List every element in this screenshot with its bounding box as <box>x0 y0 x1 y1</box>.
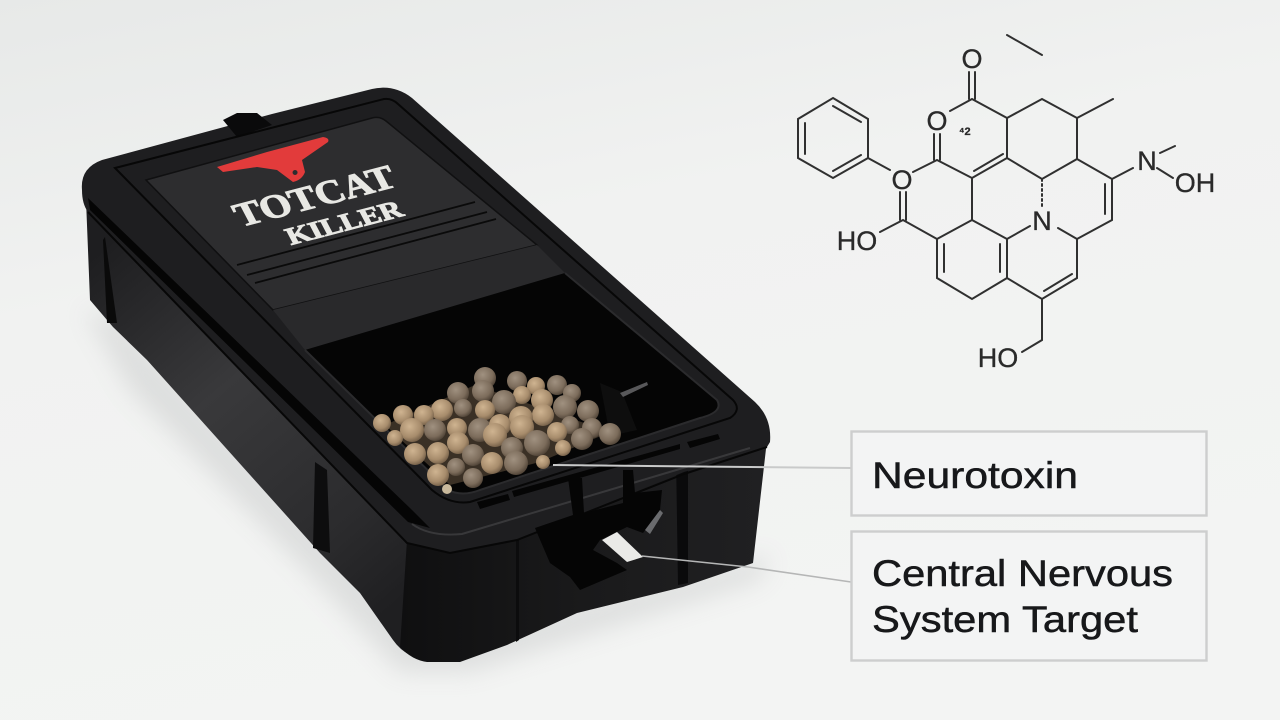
box shadow <box>85 310 770 672</box>
hopper spinner <box>600 382 648 436</box>
atom labels: OH <box>1175 168 1215 198</box>
brand name <box>226 158 409 250</box>
atom labels <box>837 44 1215 373</box>
rim slots <box>477 434 720 509</box>
brand name: TOTCAT <box>226 158 403 234</box>
atom labels: HO <box>978 343 1018 373</box>
embossed lines <box>237 202 496 283</box>
hopper opening <box>305 273 719 494</box>
atom labels: N <box>1032 206 1052 236</box>
white tag <box>602 532 643 562</box>
callout: neurotoxin: Neurotoxin <box>872 455 1078 496</box>
atom labels: ⁴2 <box>959 126 971 138</box>
lid side groove <box>88 198 430 528</box>
chemical structure diagram <box>798 35 1215 373</box>
bait pellets <box>373 367 621 494</box>
callout: central nervous system target: System Target <box>872 599 1139 640</box>
brand name: KILLER <box>281 195 409 250</box>
atom labels: O <box>961 44 983 74</box>
front highlight <box>412 448 750 535</box>
leader line: neurotoxin <box>553 465 851 468</box>
callout: neurotoxin <box>852 432 1206 516</box>
box body <box>86 200 767 662</box>
lower flap <box>273 245 565 350</box>
atom labels: O <box>926 106 948 136</box>
front latch cutout <box>535 470 663 590</box>
molecular bonds <box>798 35 1175 352</box>
lid groove <box>115 99 737 502</box>
lid <box>82 88 770 553</box>
atom labels: N <box>1137 146 1157 176</box>
lid lower edge shadow <box>88 212 767 553</box>
logo: red emblem <box>217 137 328 182</box>
lid top tab <box>223 113 272 137</box>
leader line: central nervous system <box>642 556 851 582</box>
product: bait station box <box>82 88 770 672</box>
label panel <box>146 117 537 310</box>
callout: central nervous system target <box>852 532 1206 660</box>
atom labels: O <box>891 165 913 195</box>
callout: central nervous system target: Central Nervous <box>872 553 1173 594</box>
atom labels: HO <box>837 226 877 256</box>
